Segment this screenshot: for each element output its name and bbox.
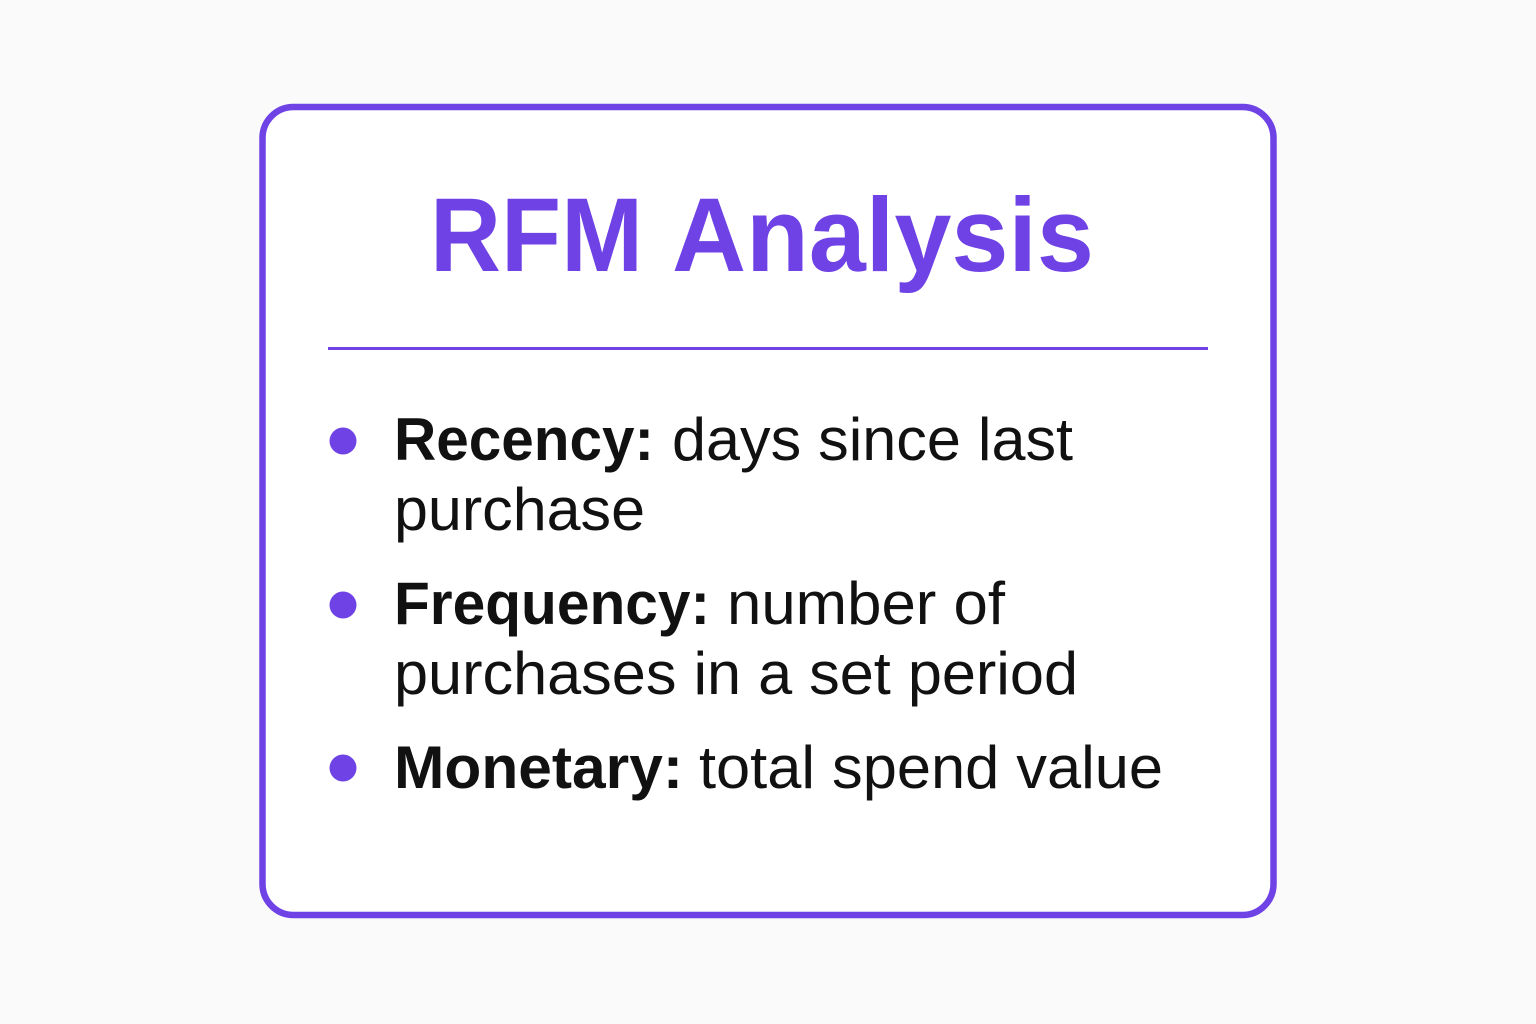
title [430,177,1094,294]
title: Analysis [672,177,1094,294]
bullet: Monetary: total spend value [699,734,1163,801]
bullet: Frequency [330,570,1078,707]
panel: RFM card [262,107,1274,915]
bullet: Monetary: Monetary: [394,734,683,801]
bullet: Frequency: Frequency: [394,570,710,637]
bullet: Recency [330,406,1073,543]
bullet: Monetary [330,734,1163,801]
bullet: Frequency: purchases in a set period [394,640,1078,707]
bullet: Frequency: number of [727,570,1005,637]
bullet: Recency: purchase [394,476,645,543]
title: RFM [430,177,643,294]
bullet: Recency: days since last [672,406,1073,473]
bullet: Recency: Recency: [394,406,654,473]
